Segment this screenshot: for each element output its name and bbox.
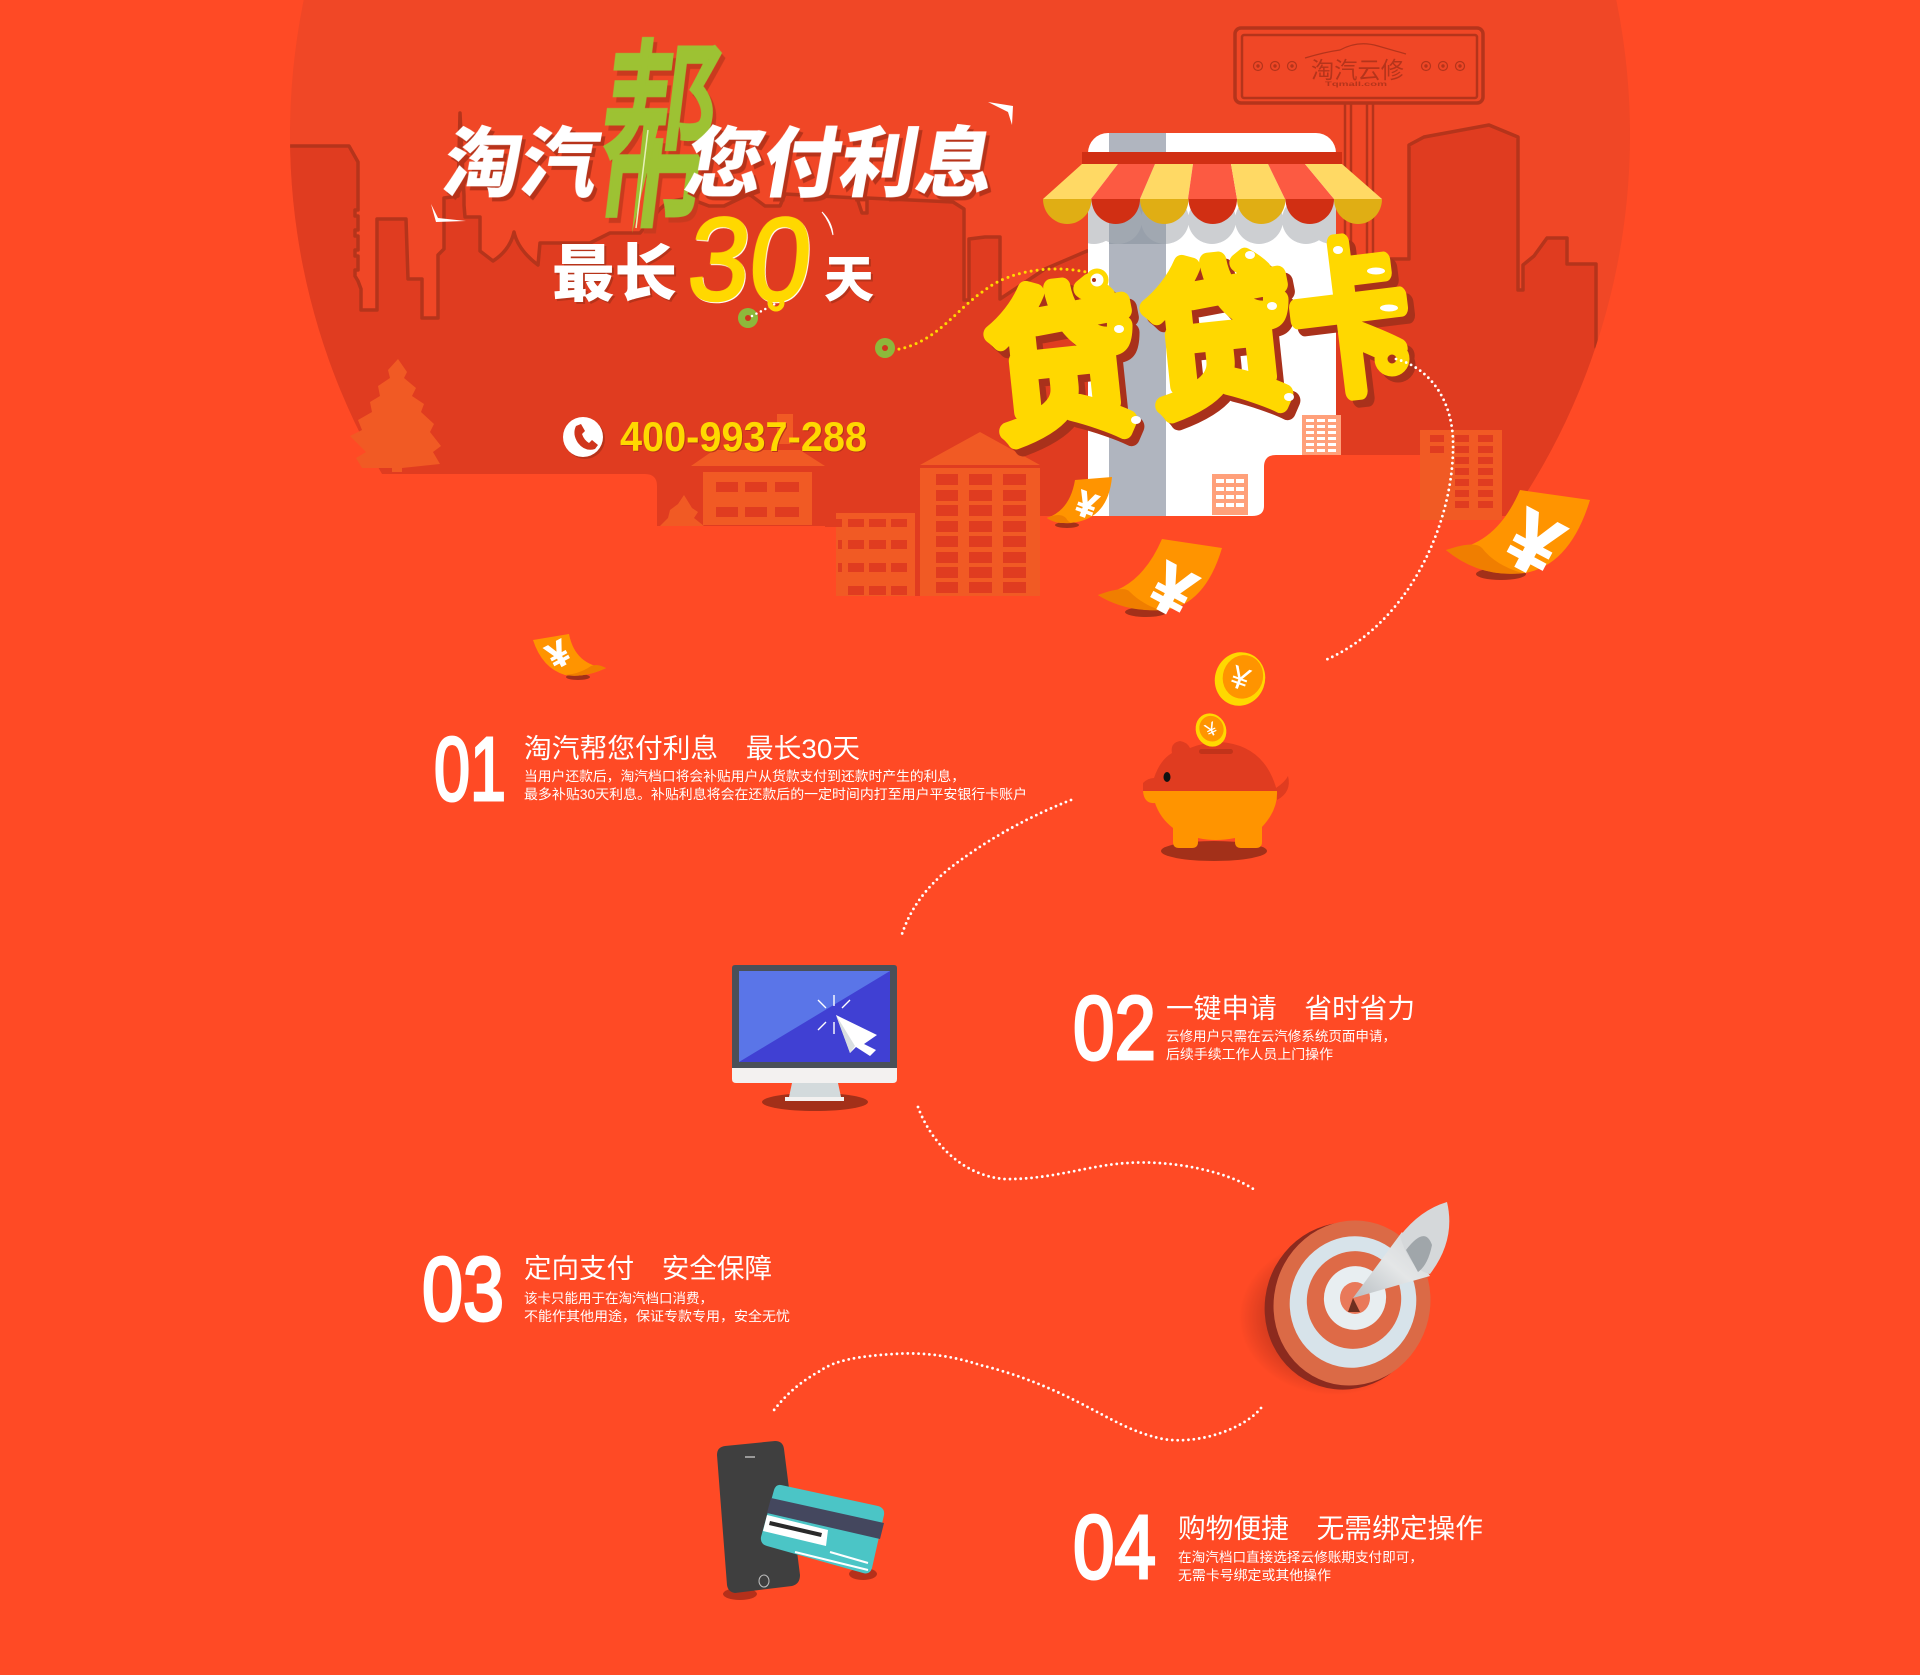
money bill: middle: ¥	[1138, 548, 1207, 633]
description 04: 在淘汽档口直接选择云修账期支付即可，	[1178, 1549, 1423, 1565]
money bill: small left	[533, 631, 606, 680]
card name: 贷贷卡: 贷	[981, 269, 1146, 464]
money bill: large right	[1446, 490, 1590, 596]
small shop-window building a	[1212, 474, 1248, 515]
monitor	[732, 965, 897, 1111]
card name: 贷贷卡: 贷	[1137, 243, 1302, 438]
piggy bank	[1143, 741, 1289, 861]
green connector dot left	[738, 297, 782, 328]
bank card	[761, 1485, 884, 1573]
number 30: 30	[682, 194, 818, 326]
city skyline silhouette	[290, 111, 1598, 596]
description 04	[1178, 1549, 1423, 1583]
description 02	[1166, 1028, 1396, 1062]
description 02: 云修用户只需在云汽修系统页面申请，	[1166, 1028, 1396, 1044]
building 4	[1420, 430, 1502, 520]
coin small: ¥	[1201, 718, 1221, 743]
building 2	[825, 513, 915, 596]
dotted path: 01 to 02	[902, 800, 1071, 934]
number 02: 02	[1073, 979, 1156, 1079]
cursor icon	[818, 995, 877, 1056]
description 03: 不能作其他用途，保证专款专用，安全无忧	[524, 1308, 790, 1324]
coin large: ¥	[1225, 658, 1255, 698]
description 04: 无需卡号绑定或其他操作	[1178, 1568, 1331, 1583]
small shop-window building b	[1302, 415, 1341, 455]
shop storefront	[1043, 133, 1382, 516]
step 01	[434, 720, 1027, 820]
awning shadow scallops	[1088, 196, 1336, 244]
small yellow ring	[1088, 271, 1106, 289]
hero circle backdrop	[290, 0, 1630, 805]
dotted path: 02 to 03	[918, 1107, 1255, 1190]
awning stripes	[1043, 164, 1382, 224]
money bill: small top	[1047, 477, 1112, 528]
gloss highlights	[1114, 246, 1398, 424]
tree small	[660, 495, 704, 526]
description 01	[524, 768, 1027, 802]
heading 02: 一键申请 省时省力	[1166, 994, 1415, 1024]
description 02: 后续手续工作人员上门操作	[1166, 1047, 1333, 1062]
number 04: 04	[1073, 1498, 1156, 1598]
yellow dotted connector	[875, 269, 1100, 358]
sub title: 天: 天	[824, 252, 874, 308]
tree left	[350, 359, 441, 472]
phone number: 400-9937-288	[620, 413, 867, 460]
number 01: 01	[434, 720, 506, 820]
target with dart	[1220, 1200, 1452, 1411]
billboard: Tqmall.com	[1325, 81, 1387, 88]
dotted path: hero to piggy bank	[1323, 359, 1453, 661]
coin large	[1207, 645, 1273, 713]
hero title: 淘汽: 淘汽	[437, 123, 606, 207]
card name: 贷贷卡: 卡	[1281, 225, 1419, 419]
card name: 贷贷卡	[981, 225, 1419, 464]
phone and bank card	[717, 1441, 884, 1600]
money bill: small top: ¥	[1070, 482, 1103, 527]
description 03: 该卡只能用于在淘汽档口消费，	[524, 1291, 713, 1306]
dotted path: 03 to 04	[771, 1353, 1261, 1440]
hero title: 帮: 帮	[585, 28, 730, 254]
heading 01: 淘汽帮您付利息 最长30天	[524, 734, 860, 764]
billboard: 淘汽云修	[1311, 57, 1404, 83]
full stop ring	[1381, 348, 1403, 370]
billboard	[1235, 28, 1483, 259]
foreground ground mask	[0, 455, 1920, 1675]
description 01: 当用户还款后，淘汽档口将会补贴用户从货款支付到还款时产生的利息，	[524, 768, 965, 784]
building 1	[691, 414, 825, 525]
sub title: 最长: 最长	[552, 240, 677, 310]
money bill: small left: ¥	[540, 631, 576, 677]
hero title: 您付利息: 您付利息	[679, 123, 1002, 207]
step 03	[422, 1240, 790, 1340]
coin small	[1190, 708, 1232, 752]
description 01: 最多补贴30天利息。补贴利息将会在还款后的一定时间内打至用户平安银行卡账户	[524, 786, 1027, 802]
money bill: middle	[1098, 539, 1222, 633]
description 03	[524, 1291, 790, 1324]
money bill: large right: ¥	[1492, 491, 1577, 596]
step 04	[1073, 1498, 1483, 1598]
number 03: 03	[422, 1240, 504, 1340]
phone icon	[563, 417, 603, 457]
heading 03: 定向支付 安全保障	[524, 1254, 772, 1284]
step 02	[1073, 979, 1415, 1079]
building 3	[920, 432, 1040, 596]
heading 04: 购物便捷 无需绑定操作	[1178, 1514, 1483, 1544]
awning red bar	[1082, 152, 1342, 164]
sparkle triangles	[431, 102, 1013, 235]
